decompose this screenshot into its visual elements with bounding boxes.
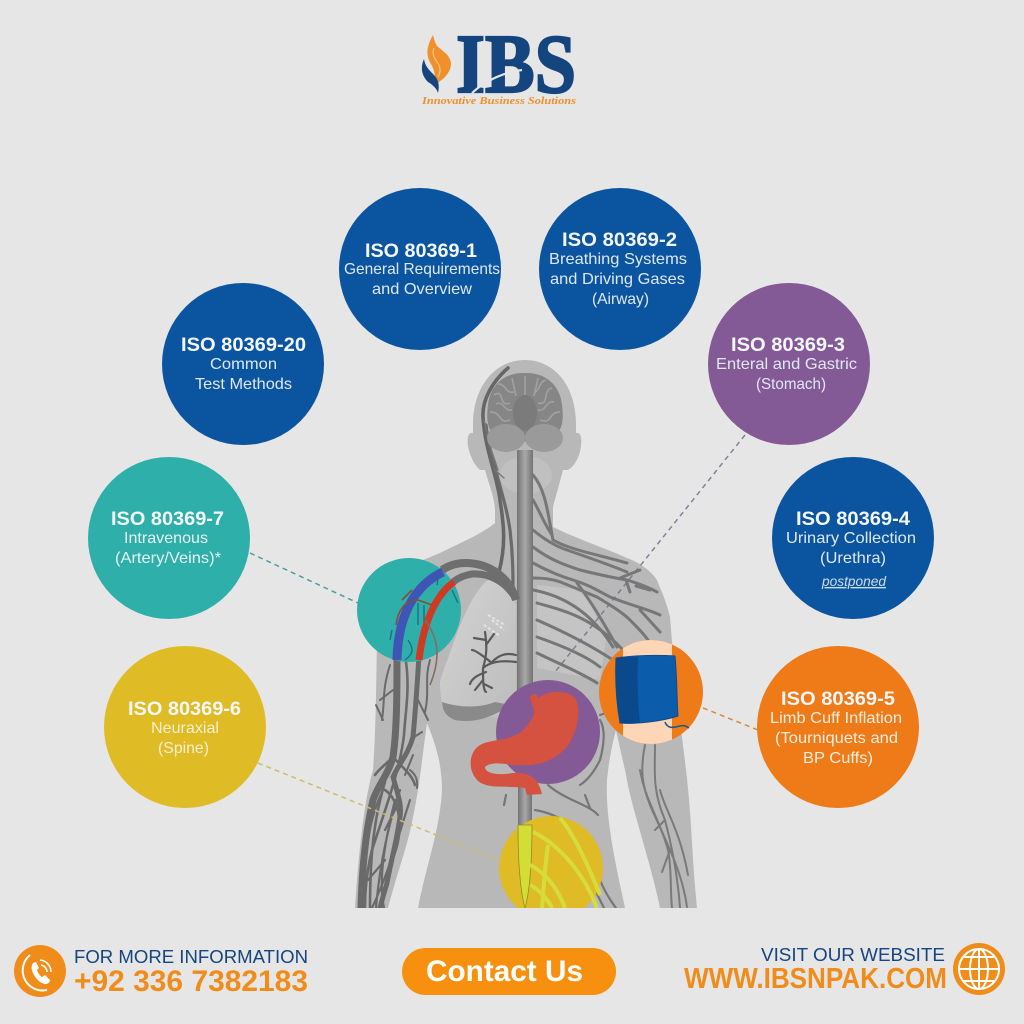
panel: ISO 80369-7: (Artery/Veins)* xyxy=(115,550,221,567)
panel: ISO 80369-1: and Overview xyxy=(372,281,472,298)
panel: ISO 80369-20: Common xyxy=(210,356,277,373)
panel: ISO 80369-3: (Stomach) xyxy=(756,376,826,393)
nerves: right arm xyxy=(640,745,688,908)
panel: ISO 80369-2: ISO 80369-2 xyxy=(562,230,677,251)
footer: phone text: FOR MORE INFORMATION xyxy=(74,947,308,967)
panel: ISO 80369-1: General Requirements xyxy=(344,261,500,278)
brain xyxy=(487,373,563,452)
footer: website text: VISIT OUR WEBSITE xyxy=(761,945,945,965)
panel: ISO 80369-6: ISO 80369-6 xyxy=(128,699,241,720)
panel: ISO 80369-20: ISO 80369-20 xyxy=(181,335,306,356)
throat xyxy=(500,456,552,494)
panel: ISO 80369-5: BP Cuffs) xyxy=(803,750,873,767)
panel: ISO 80369-5: Limb Cuff Inflation xyxy=(770,710,902,727)
panel: ISO 80369-3 xyxy=(708,283,870,445)
panel: ISO 80369-6: Neuraxial xyxy=(151,720,219,737)
panel: ISO 80369-4 xyxy=(772,457,934,619)
button: contact us: Contact Us xyxy=(426,955,583,988)
panel: ISO 80369-6: (Spine) xyxy=(158,740,209,757)
icon: stomach xyxy=(471,692,578,795)
panel: ISO 80369-4: (Urethra) xyxy=(820,550,886,567)
panel: ISO 80369-2: Breathing Systems xyxy=(549,251,687,268)
footer: phone text xyxy=(74,947,308,998)
connector: teal xyxy=(250,553,358,603)
panel: ISO 80369-5: ISO 80369-5 xyxy=(781,689,895,710)
panel: ISO 80369-1: ISO 80369-1 xyxy=(365,241,477,262)
panel: ISO 80369-5: (Tourniquets and xyxy=(775,730,898,747)
icon: blood pressure cuff xyxy=(616,655,689,728)
icon: flame xyxy=(422,35,451,93)
ribs xyxy=(533,585,623,683)
detail: cuff on orange circle xyxy=(599,636,703,748)
lower spinal cord xyxy=(518,787,532,825)
button: contact us xyxy=(402,948,616,995)
panel: ISO 80369-7 xyxy=(88,457,250,619)
panel: ISO 80369-4: ISO 80369-4 xyxy=(796,509,910,530)
panel: ISO 80369-1 xyxy=(339,188,501,350)
nerves: abdomen xyxy=(504,710,616,908)
panel: ISO 80369-7: Intravenous xyxy=(124,530,208,547)
footer: website text: WWW.IBSNPAK.COM xyxy=(684,963,947,995)
panel: ISO 80369-3: ISO 80369-3 xyxy=(731,335,845,356)
human body illustration xyxy=(355,360,697,908)
panel: ISO 80369-20: Test Methods xyxy=(195,376,292,393)
logo wordmark: IBS xyxy=(456,18,576,111)
panel: ISO 80369-20 xyxy=(162,283,324,445)
footer: website text xyxy=(684,945,947,995)
detail: stomach on purple circle xyxy=(471,680,600,795)
panel: ISO 80369-2: and Driving Gases xyxy=(550,271,685,288)
icon: globe xyxy=(953,943,1005,995)
nerves: left arm xyxy=(361,655,430,908)
connector: yellow xyxy=(258,763,498,860)
detail: artery and vein on teal circle xyxy=(357,558,516,685)
panel: ISO 80369-4: postponed xyxy=(821,574,886,589)
panel: ISO 80369-6 xyxy=(104,646,266,808)
panel: ISO 80369-2 xyxy=(539,188,701,350)
icon: phone xyxy=(14,945,66,997)
connector: orange xyxy=(703,708,758,730)
logo tagline: Innovative Business Solutions xyxy=(421,95,576,107)
logo: IBS xyxy=(421,18,576,111)
panel: ISO 80369-7: ISO 80369-7 xyxy=(111,509,224,530)
detail: spine on yellow circle xyxy=(499,816,603,908)
nerves: neck and shoulder xyxy=(483,368,660,647)
panel: ISO 80369-2: (Airway) xyxy=(592,291,649,308)
panel: ISO 80369-4: Urinary Collection xyxy=(786,530,916,547)
spinal cord xyxy=(517,450,533,690)
panel: ISO 80369-3: Enteral and Gastric xyxy=(716,356,857,373)
body silhouette xyxy=(355,360,697,908)
panel: ISO 80369-5 xyxy=(757,646,919,808)
lung xyxy=(440,580,516,721)
footer: phone text: +92 336 7382183 xyxy=(74,965,308,998)
connector: purple xyxy=(555,435,745,672)
